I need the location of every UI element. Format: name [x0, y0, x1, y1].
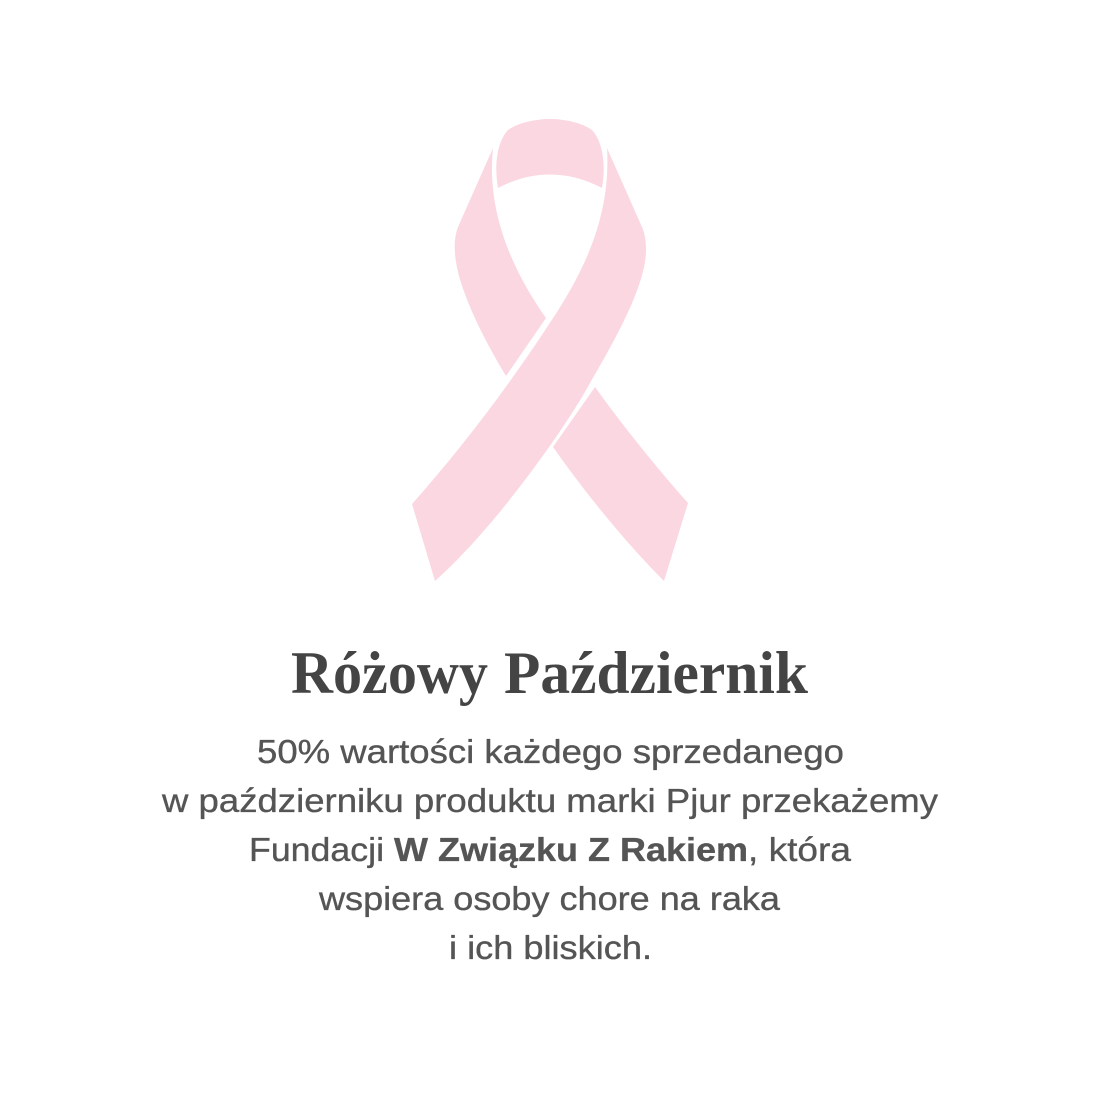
body text: w październiku produktu marki Pjur przekażemy [161, 782, 939, 819]
body text: Fundacji [249, 831, 384, 868]
body text [161, 733, 939, 966]
body text: wspiera osoby chore na raka [318, 880, 781, 917]
body text: i ich bliskich. [449, 929, 652, 966]
icon: pink awareness ribbon [412, 119, 688, 581]
title: Różowy [291, 640, 488, 706]
ribbon left band [455, 148, 546, 376]
body text: 50% wartości każdego sprzedanego [257, 733, 844, 770]
body text: W Związku Z Rakiem [394, 831, 748, 868]
ribbon top loop [496, 119, 604, 188]
ribbon right tail [553, 387, 688, 581]
ribbon main band [412, 148, 646, 581]
title: Październik [504, 640, 809, 706]
title [291, 640, 809, 706]
body text: , która [748, 831, 852, 868]
